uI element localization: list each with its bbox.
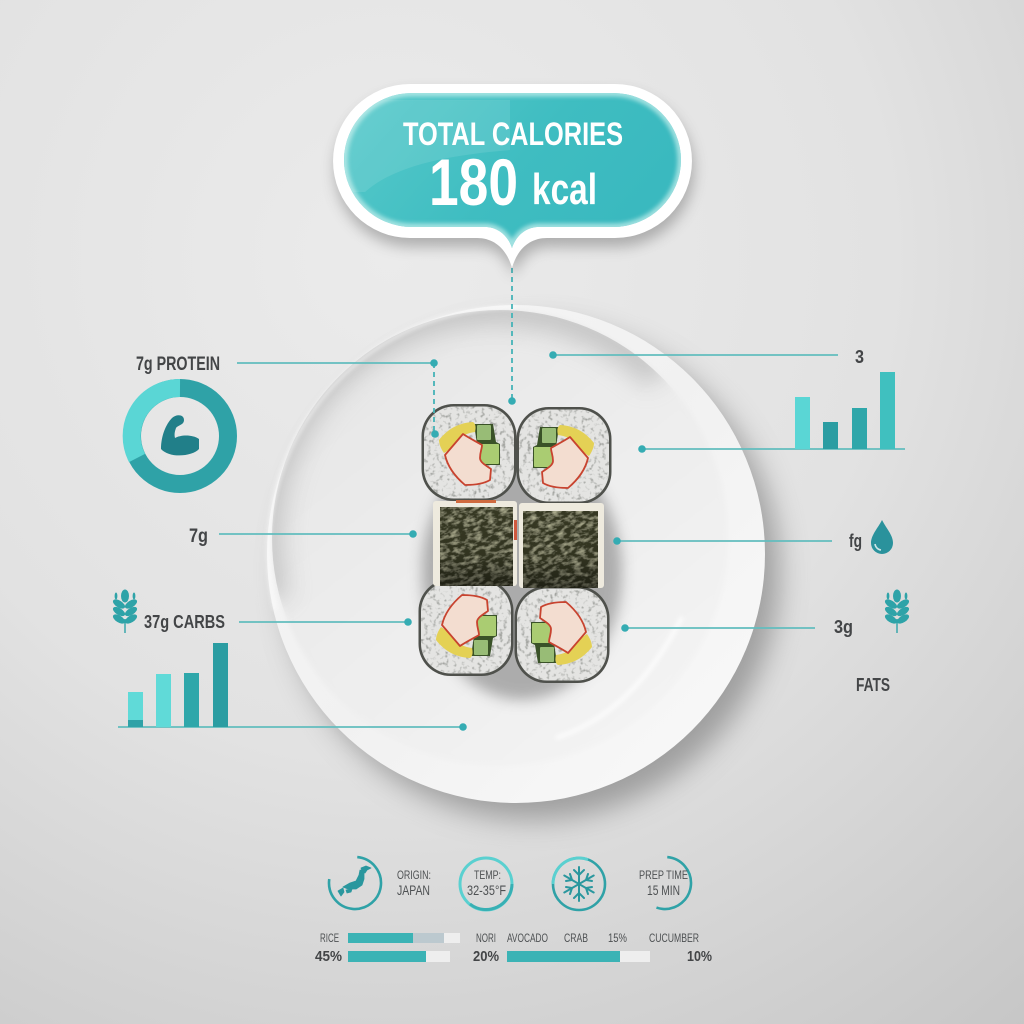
ingredient labels: 15%	[608, 931, 627, 945]
text: origin japan	[397, 868, 431, 898]
label: 3: 3	[855, 347, 864, 367]
roll: top right	[516, 407, 612, 504]
icon: wheat right	[883, 590, 911, 633]
icon: flexed arm	[161, 415, 199, 455]
icon: wheat left	[111, 590, 139, 633]
label: 7g: 7g	[189, 526, 208, 547]
plate	[264, 305, 780, 820]
ingredient labels: RICE	[320, 931, 339, 945]
roll: bottom right	[514, 586, 610, 683]
ingredient labels	[315, 931, 712, 965]
label: 7g protein: 7g PROTEIN	[136, 354, 220, 375]
ingredient labels: CUCUMBER	[649, 931, 699, 945]
callout bubble: total calories	[333, 84, 694, 277]
text: temp range: 32-35°F	[467, 883, 506, 898]
callout dots	[404, 351, 646, 731]
sushi rolls	[410, 404, 627, 700]
callout lines	[118, 268, 905, 727]
unit: kcal: kcal	[532, 165, 597, 214]
text: origin japan: JAPAN	[397, 883, 430, 898]
ingredient labels: 20%	[473, 949, 499, 965]
ring: prep time	[637, 855, 693, 911]
text: 15 min: 15 MIN	[647, 883, 680, 898]
ingredient bar: long	[507, 951, 650, 962]
icon: japan map	[338, 866, 371, 896]
ingredient labels: NORI	[476, 931, 496, 945]
label: 37g carbs: 37g CARBS	[144, 612, 225, 632]
roll: bottom left	[418, 579, 514, 676]
ring: temperature	[460, 858, 512, 910]
bar chart: right	[795, 372, 895, 449]
ingredient bar: rice lower	[348, 951, 450, 962]
ingredient labels: 10%	[687, 949, 712, 965]
roll: top left	[422, 404, 516, 501]
label: fg: fg	[849, 531, 862, 551]
icon: snowflake	[564, 867, 594, 901]
ingredient labels: AVOCADO	[507, 931, 548, 945]
ingredient labels: CRAB	[564, 931, 588, 945]
label: 3g: 3g	[834, 617, 853, 637]
icon: origin japan ring	[327, 855, 383, 911]
roll side: middle right	[519, 503, 604, 588]
ingredient labels: 45%	[315, 949, 342, 965]
ingredient bar: rice top	[348, 933, 460, 943]
label: fats: FATS	[856, 675, 890, 695]
text: origin japan: ORIGIN:	[397, 868, 431, 882]
roll side: middle left	[433, 500, 517, 586]
heading: total calories: TOTAL CALORIES	[403, 116, 623, 152]
value: 180: 180	[429, 145, 518, 219]
text: prep time: PREP TIME	[639, 868, 688, 882]
donut chart: protein	[132, 388, 228, 484]
icon: water drop	[871, 520, 893, 554]
ring: snowflake	[553, 858, 605, 910]
text: temp: TEMP:	[474, 868, 501, 882]
bar chart: carbs	[128, 643, 228, 727]
